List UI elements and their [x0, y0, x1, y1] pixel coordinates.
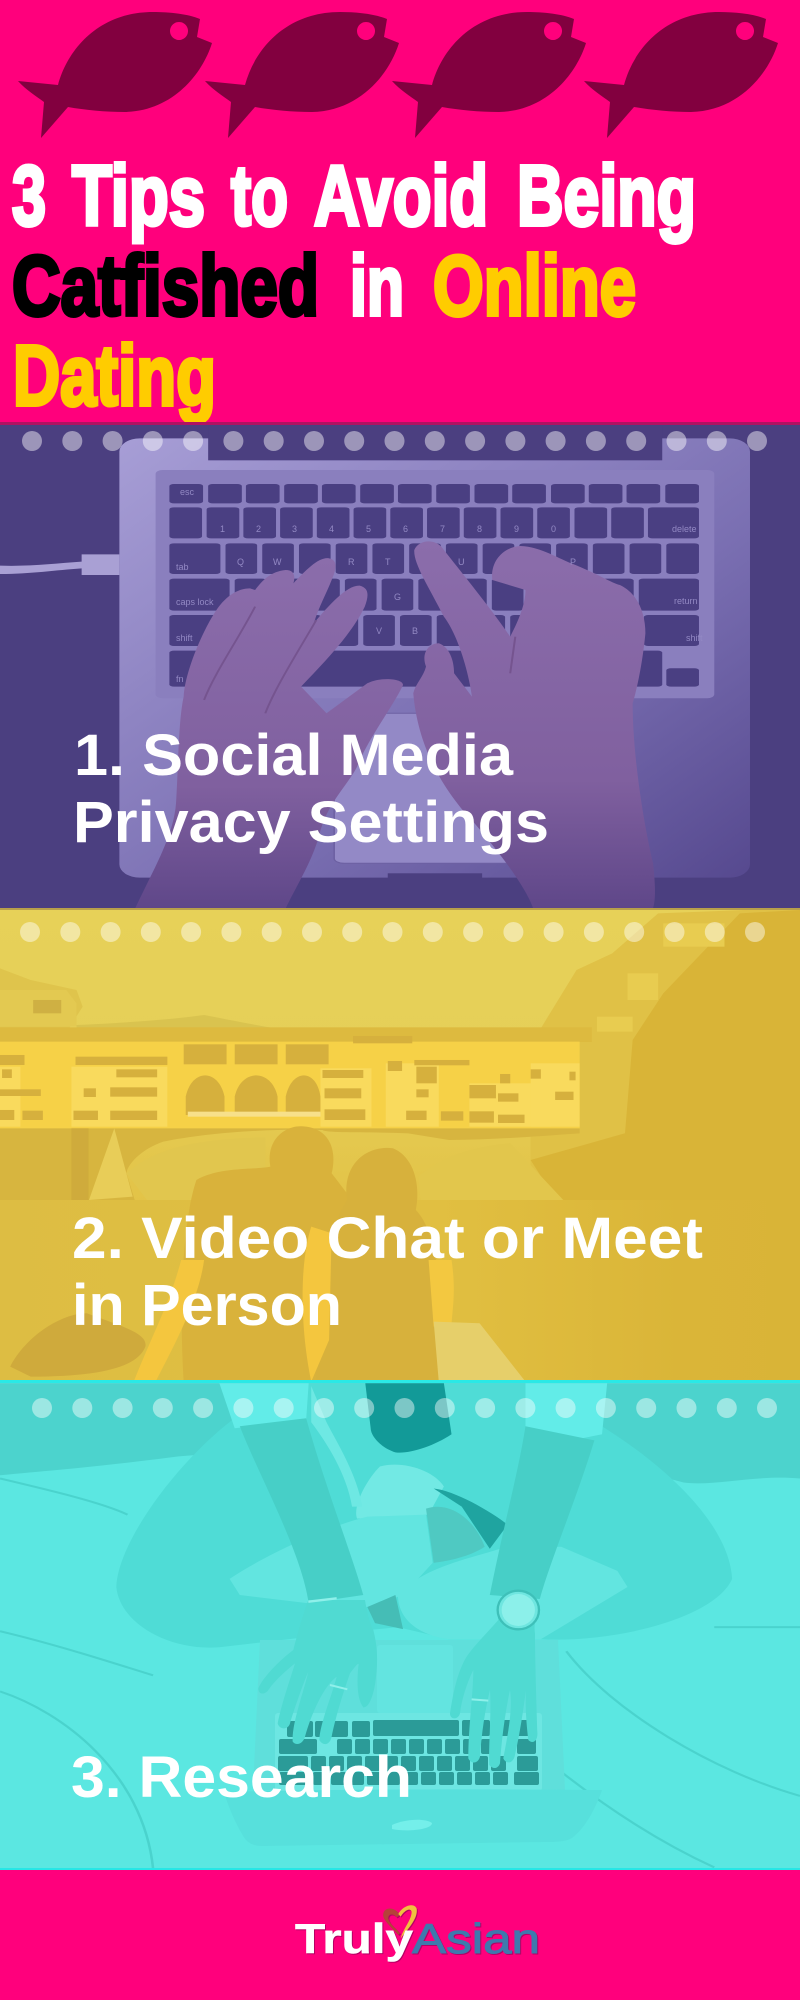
photo: person sitting on bed — [0, 1383, 800, 1868]
keyboard labels: P — [570, 557, 576, 567]
icon: fish 1 — [18, 12, 212, 138]
title: in — [350, 239, 404, 334]
keyboard labels: caps lock — [176, 597, 214, 607]
icon: heart — [383, 1905, 417, 1938]
dots row 3 — [32, 1398, 777, 1418]
keyboard labels: 2 — [256, 524, 261, 534]
photo: hands with watch and bracelet — [258, 1591, 540, 1768]
keyboard labels: shift — [176, 633, 193, 643]
heading: tip 2 — [72, 1206, 703, 1338]
keyboard labels: esc — [180, 487, 195, 497]
keyboard labels: tab — [176, 562, 189, 572]
keyboard labels: G — [394, 592, 401, 602]
icon: fish 2 — [205, 12, 399, 138]
keyboard labels: delete — [672, 524, 697, 534]
keyboard labels: fn — [176, 674, 184, 684]
title — [12, 149, 696, 424]
title: Catfished — [12, 239, 319, 334]
logo: TrulyAsian: Truly — [295, 1915, 414, 1962]
keyboard labels: 1 — [220, 524, 225, 534]
photo: distant buildings and far bank — [0, 910, 800, 1382]
keyboard labels: 6 — [403, 524, 408, 534]
keyboard labels — [176, 487, 703, 684]
keyboard labels: 5 — [366, 524, 371, 534]
keyboard labels: 0 — [551, 524, 556, 534]
keyboard labels: 7 — [440, 524, 445, 534]
logo: TrulyAsian — [295, 1905, 540, 1962]
heading: tip 1 — [73, 723, 549, 855]
heading: tip 1: Privacy Settings — [73, 790, 549, 855]
keyboard labels: B — [412, 626, 418, 636]
heading: tip 3: 3. Research — [71, 1745, 412, 1810]
photo: laptop and typing hands — [0, 426, 750, 908]
keyboard labels: R — [348, 557, 355, 567]
panel: tip 3 research — [0, 1380, 800, 1869]
keyboard labels: 3 — [292, 524, 297, 534]
panel: tip 2 video chat or meet — [0, 908, 800, 1382]
photo: laptop on bed — [224, 1640, 602, 1846]
dots row 1 — [22, 431, 767, 451]
icon: fish 3 — [392, 12, 586, 138]
logo: TrulyAsian: Asian — [412, 1915, 540, 1962]
title: to — [231, 149, 288, 244]
dots row 2 — [20, 922, 765, 942]
keyboard labels: 4 — [329, 524, 334, 534]
title: Tips — [72, 149, 205, 244]
photo: ponte vecchio bridge — [0, 1027, 592, 1200]
panel: tip 1 social media privacy — [0, 422, 800, 909]
fish icon row — [18, 12, 778, 138]
keyboard labels: T — [385, 557, 391, 567]
title: Dating — [13, 329, 216, 424]
icon: fish 4 — [584, 12, 778, 138]
heading: tip 2: in Person — [72, 1273, 342, 1338]
keyboard labels: 8 — [477, 524, 482, 534]
keyboard labels: W — [273, 557, 282, 567]
keyboard labels: return — [674, 596, 698, 606]
photo: couple seen from behind — [10, 1126, 526, 1382]
title: Being — [517, 149, 696, 244]
footer — [0, 1868, 800, 2000]
title: Online — [433, 239, 636, 334]
header background — [0, 0, 800, 425]
title: Avoid — [314, 149, 488, 244]
keyboard labels: U — [458, 557, 464, 567]
keyboard labels: Q — [237, 557, 244, 567]
keyboard labels: shift — [686, 633, 703, 643]
title: 3 — [12, 149, 46, 244]
keyboard labels: 9 — [514, 524, 519, 534]
keyboard labels: V — [376, 626, 382, 636]
heading: tip 1: 1. Social Media — [74, 723, 514, 788]
heading: tip 2: 2. Video Chat or Meet — [72, 1206, 703, 1271]
